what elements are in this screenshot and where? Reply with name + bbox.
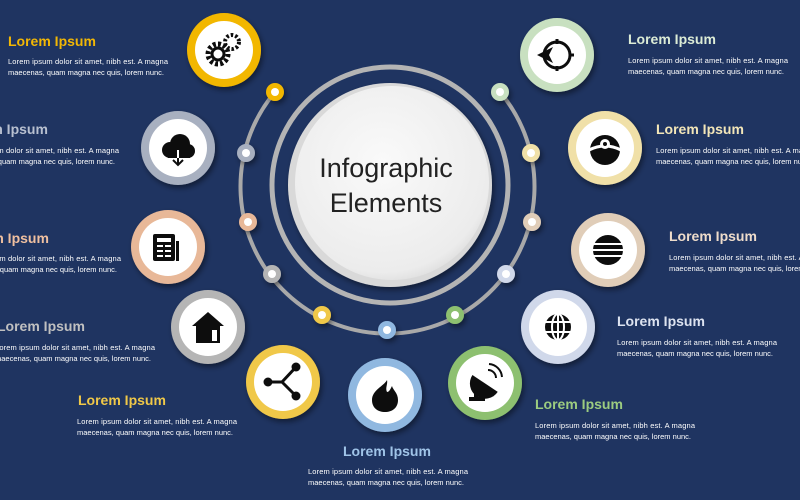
texts: Lorem Ipsum — [78, 392, 166, 408]
icon: stripes — [571, 213, 645, 287]
text: maecenas, quam magna nec quis, lorem nunc. — [535, 432, 691, 441]
texts: Lorem Ipsum — [669, 228, 757, 244]
inner ring — [272, 67, 508, 303]
text: maecenas, quam magna nec quis, lorem nunc. — [308, 478, 464, 487]
text: Lorem ipsum dolor sit amet, nibh est. A magna — [8, 57, 169, 66]
text: maecenas, quam magna nec quis, lorem nunc. — [77, 428, 233, 437]
texts: Lorem Ipsum — [8, 33, 96, 49]
icon: gears — [187, 13, 261, 87]
icon: globe — [521, 290, 595, 364]
text: maecenas, quam magna nec quis, lorem nunc. — [617, 349, 773, 358]
title — [319, 153, 453, 218]
icon: house — [171, 290, 245, 364]
text: maecenas, quam magna nec quis, lorem nunc. — [628, 67, 784, 76]
icon: satellite — [448, 346, 522, 420]
icon: share — [246, 345, 320, 419]
text: Lorem ipsum dolor sit amet, nibh est. A magna — [628, 56, 789, 65]
text: Lorem ipsum dolor sit amet, nibh est. A magna — [535, 421, 696, 430]
text: maecenas, quam magna nec quis, lorem nunc. — [8, 68, 164, 77]
text: Lorem ipsum dolor sit amet, nibh est. A magna — [308, 467, 469, 476]
title: Infographic — [319, 153, 453, 183]
center circle — [288, 83, 492, 287]
texts: Lorem Ipsum — [343, 443, 431, 459]
text: Lorem ipsum dolor sit amet, nibh est. A magna — [77, 417, 238, 426]
texts: Lorem Ipsum — [656, 121, 744, 137]
texts: Lorem Ipsum — [535, 396, 623, 412]
icon: fire — [348, 358, 422, 432]
text: Lorem ipsum dolor sit amet, nibh est. A magna — [617, 338, 778, 347]
arc dots — [237, 83, 541, 339]
texts: Lorem Ipsum — [628, 31, 716, 47]
outer dotted arc — [241, 92, 535, 334]
icon: pokeball — [568, 111, 642, 185]
icon: newspaper — [131, 210, 205, 284]
icon: cloud download — [141, 111, 215, 185]
title: Elements — [330, 188, 442, 218]
texts: Lorem Ipsum — [617, 313, 705, 329]
icon: compass — [520, 18, 594, 92]
